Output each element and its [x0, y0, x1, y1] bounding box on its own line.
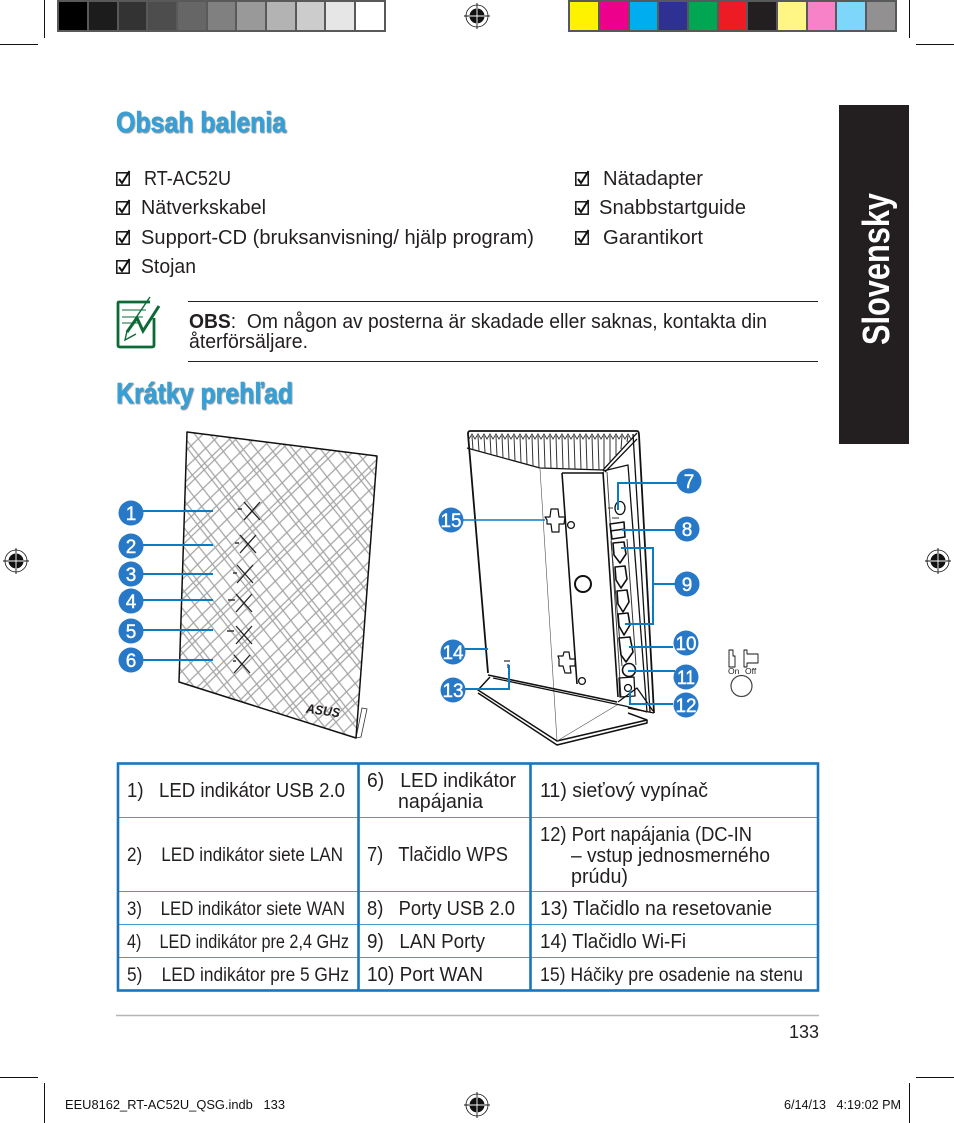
callouts back: 8	[682, 520, 692, 541]
callouts front: 4	[126, 592, 137, 613]
row 2: 2) LED indikátor siete LAN	[127, 844, 343, 866]
callouts front: 2	[126, 537, 136, 558]
checklist left column	[117, 168, 534, 278]
row 5: 15) Háčiky pre osadenie na stenu	[540, 964, 803, 986]
heading: package contents: Obsah balenia	[116, 107, 287, 139]
ASUS logo: ASUS	[304, 701, 341, 720]
router front view	[178, 431, 378, 739]
checklist right column: Garantikort	[603, 227, 703, 249]
row 1	[127, 770, 708, 813]
registration mark top	[464, 3, 490, 29]
heading: quick overview: Krátky prehľad	[116, 378, 293, 410]
checklist left column: Nätverkskabel	[141, 197, 266, 219]
callouts front: 1	[126, 504, 136, 525]
print slug left: EEU8162_RT-AC52U_QSG.indb 133	[65, 1098, 285, 1112]
callouts front: 6	[126, 651, 136, 672]
wall mount holes	[545, 509, 565, 532]
footer rule	[116, 1014, 819, 1016]
vent zigzag	[469, 434, 631, 439]
callouts front: 3	[126, 565, 136, 586]
row 2: – vstup jednosmerného	[571, 845, 770, 867]
callouts front	[118, 500, 213, 672]
back ports	[615, 502, 625, 514]
vent fins	[472, 436, 628, 470]
checklist right column: Snabbstartguide	[599, 197, 746, 219]
registration mark right	[925, 548, 951, 574]
process colour bar	[568, 0, 897, 32]
checklist right column	[576, 168, 746, 249]
registration mark bottom	[464, 1092, 490, 1118]
row 3	[127, 898, 772, 920]
row 3: 13) Tlačidlo na resetovanie	[540, 898, 772, 920]
power switch detail	[728, 650, 758, 696]
callouts back: 15	[440, 511, 462, 532]
row 4: 9) LAN Porty	[367, 931, 485, 953]
row 1: 6) LED indikátor	[367, 770, 516, 792]
registration mark left	[3, 548, 29, 574]
page number: 133	[789, 1022, 819, 1042]
row 2: 7) Tlačidlo WPS	[367, 844, 508, 866]
row 1: napájania	[398, 791, 484, 813]
note callout: OBS: Om någon av posterna är skadade eller saknas, kontakta din	[189, 311, 767, 333]
row 5	[127, 964, 803, 986]
callouts front: 5	[126, 622, 136, 643]
checklist left column: RT-AC52U	[144, 168, 231, 190]
row 2: prúdu)	[571, 866, 628, 888]
callouts back: 9	[682, 575, 692, 596]
row 1: 1) LED indikátor USB 2.0	[127, 780, 345, 802]
note callout: återförsäljare.	[189, 331, 308, 353]
power switch detail: Off	[745, 666, 757, 676]
row 2: 12) Port napájania (DC-IN	[540, 824, 752, 846]
callouts back: 10	[676, 634, 696, 655]
row 2	[127, 824, 770, 888]
power switch detail: On	[728, 666, 740, 676]
row 3: 3) LED indikátor siete WAN	[127, 898, 345, 920]
specification table	[118, 763, 818, 991]
checklist left column: Stojan	[141, 256, 196, 278]
callouts back: 14	[442, 643, 464, 664]
row 1: 11) sieťový vypínač	[540, 780, 708, 802]
row 5: 5) LED indikátor pre 5 GHz	[127, 964, 349, 986]
checklist left column: Support-CD (bruksanvisning/ hjälp program)	[141, 227, 534, 249]
language side tab	[839, 105, 909, 444]
language side tab: Slovensky	[856, 193, 898, 345]
callouts back: 12	[676, 696, 696, 717]
row 4: 14) Tlačidlo Wi-Fi	[540, 931, 686, 953]
row 5: 10) Port WAN	[367, 964, 483, 986]
callouts back	[438, 468, 702, 718]
callouts back: 11	[677, 668, 695, 689]
icon: note pencil	[118, 297, 159, 347]
checklist right column: Nätadapter	[603, 168, 703, 190]
callouts back: 7	[684, 472, 694, 493]
row 3: 8) Porty USB 2.0	[367, 898, 515, 920]
print slug right: 6/14/13 4:19:02 PM	[784, 1098, 901, 1112]
grayscale colour bar	[57, 0, 386, 32]
row 4	[127, 931, 686, 953]
row 4: 4) LED indikátor pre 2,4 GHz	[127, 931, 349, 953]
callouts back: 13	[442, 681, 464, 702]
router back view	[467, 431, 654, 745]
stand and base	[488, 675, 617, 702]
note callout	[188, 302, 818, 362]
